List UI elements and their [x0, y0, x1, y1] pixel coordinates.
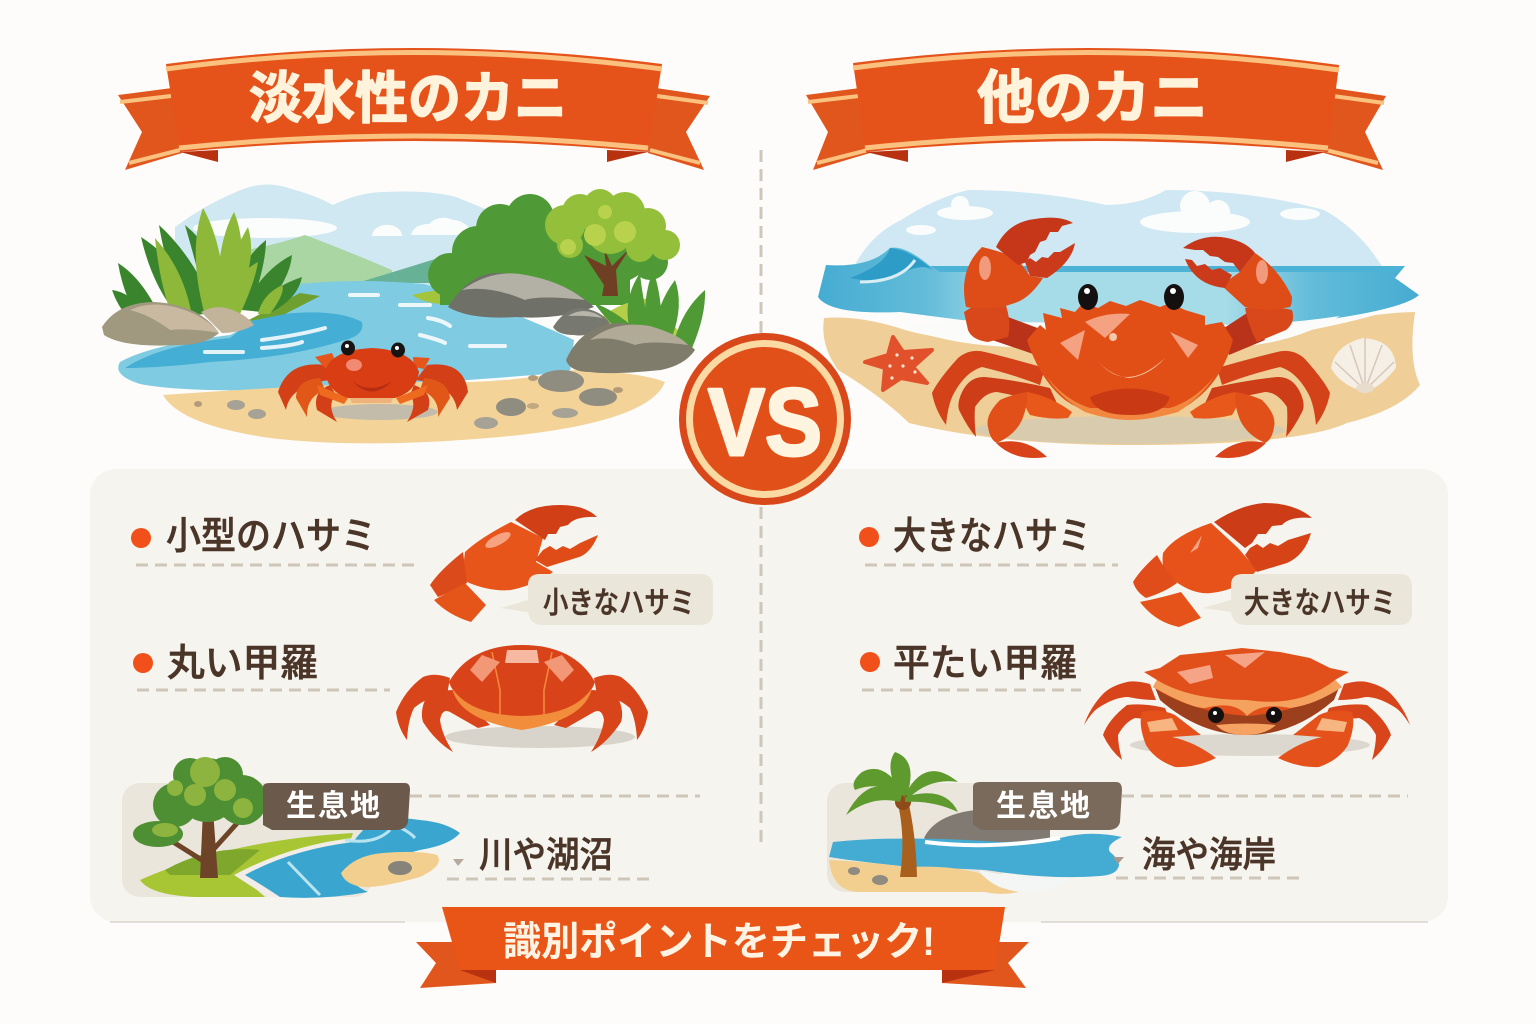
item: small pincers [131, 516, 420, 565]
palm tree [846, 752, 958, 877]
grass left [112, 208, 320, 322]
item: round shell [133, 643, 390, 690]
sand and foam [823, 312, 1420, 445]
item: big pincers: 大きなハサミ [893, 516, 1091, 558]
text: rivers and lakes: 川や湖沼 [479, 834, 613, 875]
heading text: 他のカニ [977, 66, 1208, 131]
item: habitat freshwater [122, 757, 460, 898]
starfish [865, 337, 932, 390]
item: flat shell: 平たい甲羅 [893, 643, 1077, 685]
pebbles [194, 370, 623, 429]
sea [829, 834, 1122, 877]
river water [118, 281, 574, 390]
item: small pincers: 小型のハサミ [166, 516, 376, 558]
illustration: big claw [1133, 503, 1312, 627]
scene: river landscape [102, 185, 705, 443]
VS badge: VS [708, 369, 822, 476]
illustration: small claw [430, 505, 598, 622]
small crab [278, 340, 468, 422]
sand [163, 370, 665, 443]
left legs [932, 351, 1072, 458]
scene: seashore landscape [818, 190, 1420, 458]
banner text: 識別ポイントをチェック! [503, 920, 935, 964]
rocks [102, 273, 695, 373]
banner: check points [416, 907, 1029, 988]
tree [133, 757, 267, 878]
tree cluster [412, 189, 680, 305]
item: habitat seashore [827, 752, 1122, 894]
callout: big claw [1203, 574, 1412, 625]
sea [818, 248, 1419, 325]
shell [1331, 338, 1396, 393]
grass right [592, 270, 705, 350]
VS badge [679, 333, 851, 505]
big crab shell [1027, 300, 1233, 418]
label: habitat left: 生息地 [286, 790, 380, 823]
text: rivers and lakes [447, 834, 650, 879]
callout: big claw: 大きなハサミ [1244, 587, 1396, 620]
label: habitat right [973, 782, 1122, 830]
panel: comparison background [90, 469, 1448, 922]
illustration: round crab [396, 645, 648, 752]
callout: small claw: 小きなハサミ [543, 587, 695, 620]
callout: small claw [501, 574, 713, 625]
item: round shell: 丸い甲羅 [167, 643, 318, 685]
right legs [1190, 351, 1330, 458]
rock [924, 810, 1050, 842]
heading text: 淡水性のカニ [249, 67, 567, 130]
label: habitat right: 生息地 [996, 790, 1090, 823]
big crab [932, 218, 1330, 458]
text: seas and coasts: 海や海岸 [1142, 834, 1276, 875]
river map [140, 833, 353, 897]
left arm and claw [964, 218, 1075, 355]
beach [829, 860, 1040, 894]
banner: other crab heading [806, 48, 1386, 170]
illustration: flat crab [1084, 648, 1410, 767]
banner: freshwater crab heading [118, 48, 710, 170]
right arm and claw [1183, 237, 1293, 355]
label: habitat left [263, 783, 410, 830]
